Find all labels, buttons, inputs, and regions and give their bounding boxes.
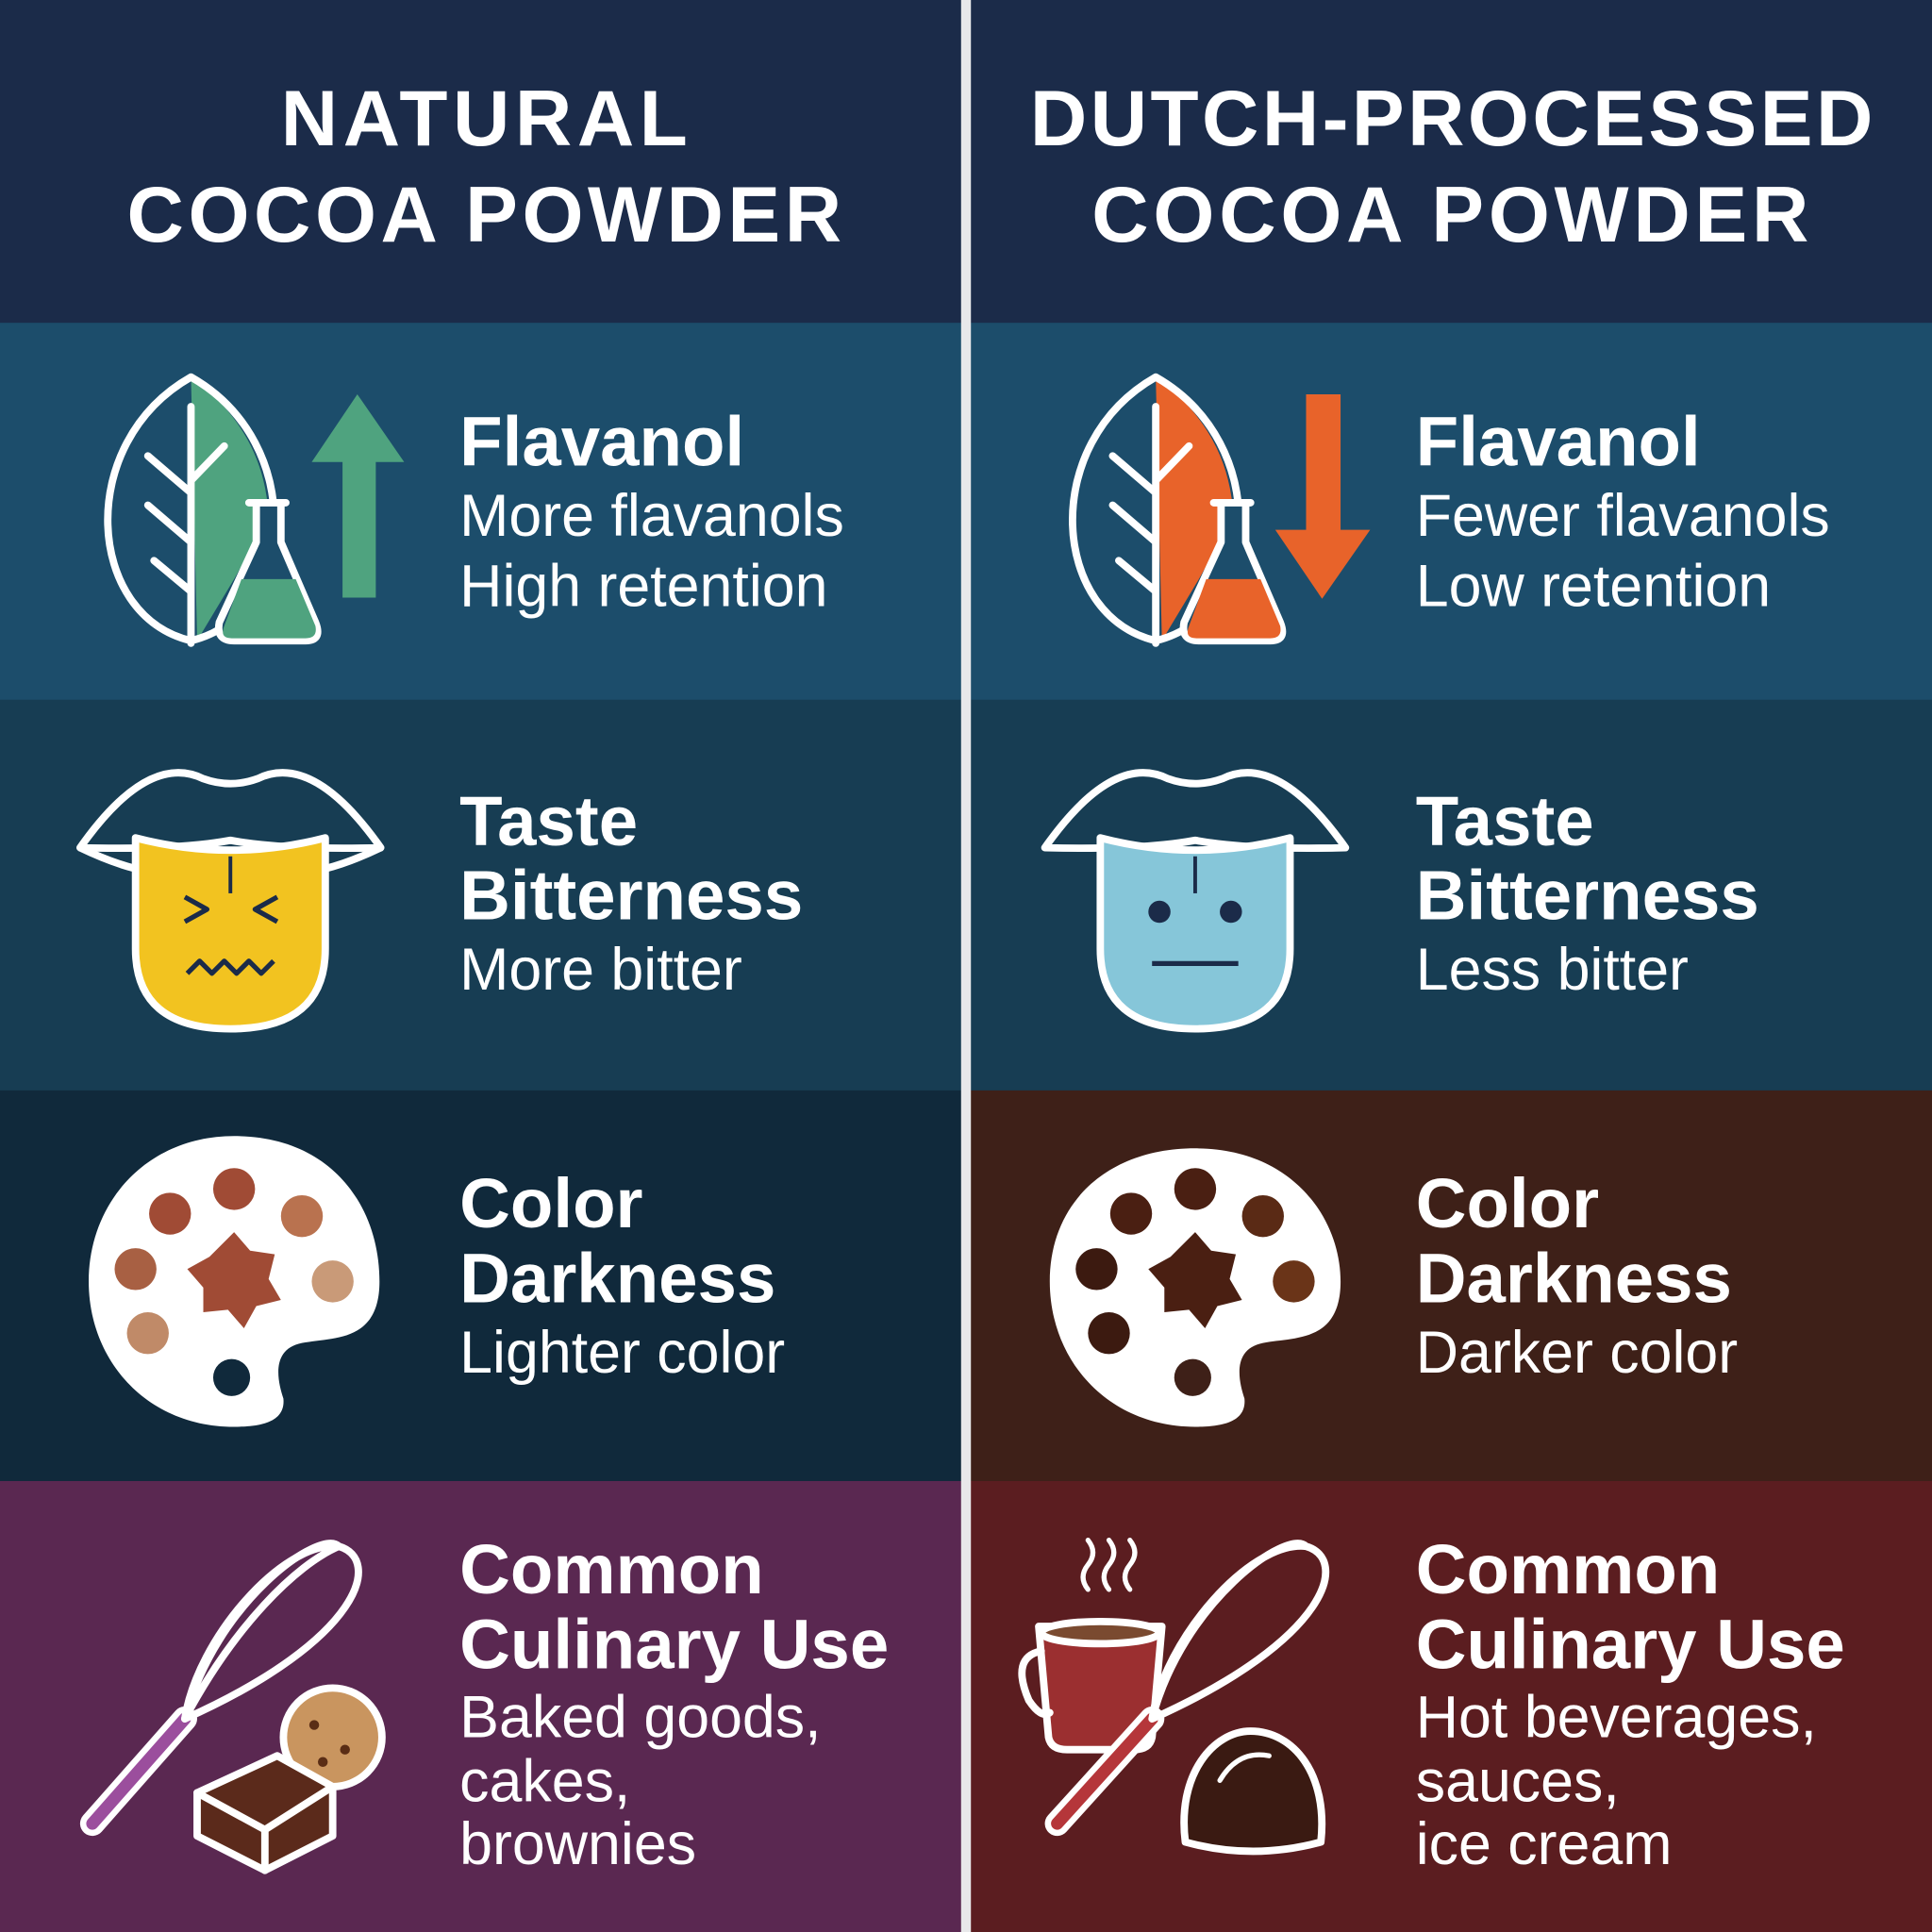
title: natural xyxy=(127,74,841,258)
text: culinary dutch: ice cream xyxy=(1416,1811,1672,1877)
text: color dutch: Darker color xyxy=(1416,1320,1738,1386)
text: flavanol natural xyxy=(459,403,844,620)
text: flavanol dutch xyxy=(1416,403,1830,620)
text: flavanol dutch: Fewer flavanols xyxy=(1416,483,1830,549)
text: flavanol natural: High retention xyxy=(459,554,827,620)
text: culinary dutch: Common xyxy=(1416,1530,1720,1608)
title: dutch: COCOA POWDER xyxy=(1091,170,1808,258)
icon: tongue bitter xyxy=(80,773,381,1029)
text: culinary natural: cakes, xyxy=(459,1749,630,1815)
text: taste natural xyxy=(459,782,803,1003)
text: color natural: Lighter color xyxy=(459,1320,785,1386)
text: color dutch xyxy=(1416,1164,1738,1386)
text: flavanol natural: Flavanol xyxy=(459,403,744,481)
text: culinary dutch: Hot beverages, xyxy=(1416,1685,1817,1751)
text: color natural: Darkness xyxy=(459,1240,775,1318)
title: natural: COCOA POWDER xyxy=(127,170,841,258)
text: culinary dutch: Culinary Use xyxy=(1416,1605,1845,1683)
title: dutch: DUTCH-PROCESSED xyxy=(1030,74,1873,162)
text: taste natural: Taste xyxy=(459,782,638,860)
text: culinary natural: brownies xyxy=(459,1811,696,1877)
icon: whisk brownie cookie xyxy=(92,1543,382,1871)
text: culinary natural: Common xyxy=(459,1530,764,1608)
text: flavanol dutch: Low retention xyxy=(1416,554,1771,620)
text: taste natural: More bitter xyxy=(459,937,742,1003)
text: culinary natural: Culinary Use xyxy=(459,1605,889,1683)
text: taste dutch: Less bitter xyxy=(1416,937,1689,1003)
text: culinary dutch: sauces, xyxy=(1416,1749,1620,1815)
text: taste dutch xyxy=(1416,782,1759,1003)
icon: palette light xyxy=(89,1136,379,1426)
text: color natural xyxy=(459,1164,785,1386)
text: taste natural: Bitterness xyxy=(459,856,803,934)
text: color dutch: Color xyxy=(1416,1164,1599,1242)
text: culinary dutch xyxy=(1416,1530,1845,1877)
text: flavanol dutch: Flavanol xyxy=(1416,403,1701,481)
text: taste dutch: Taste xyxy=(1416,782,1594,860)
icon: mug whisk truffle xyxy=(1022,1541,1325,1851)
text: flavanol natural: More flavanols xyxy=(459,483,844,549)
text: color natural: Color xyxy=(459,1164,643,1242)
text: culinary natural: Baked goods, xyxy=(459,1685,822,1751)
icon: leaf flask down xyxy=(1073,377,1370,643)
icon: tongue less bitter xyxy=(1045,773,1345,1029)
title: natural: NATURAL xyxy=(281,74,688,162)
icon: leaf flask up xyxy=(108,377,404,643)
text: color dutch: Darkness xyxy=(1416,1240,1732,1318)
text: taste dutch: Bitterness xyxy=(1416,856,1759,934)
title: dutch xyxy=(1030,74,1873,258)
icon: palette dark xyxy=(1050,1148,1341,1426)
text: culinary natural xyxy=(459,1530,889,1877)
